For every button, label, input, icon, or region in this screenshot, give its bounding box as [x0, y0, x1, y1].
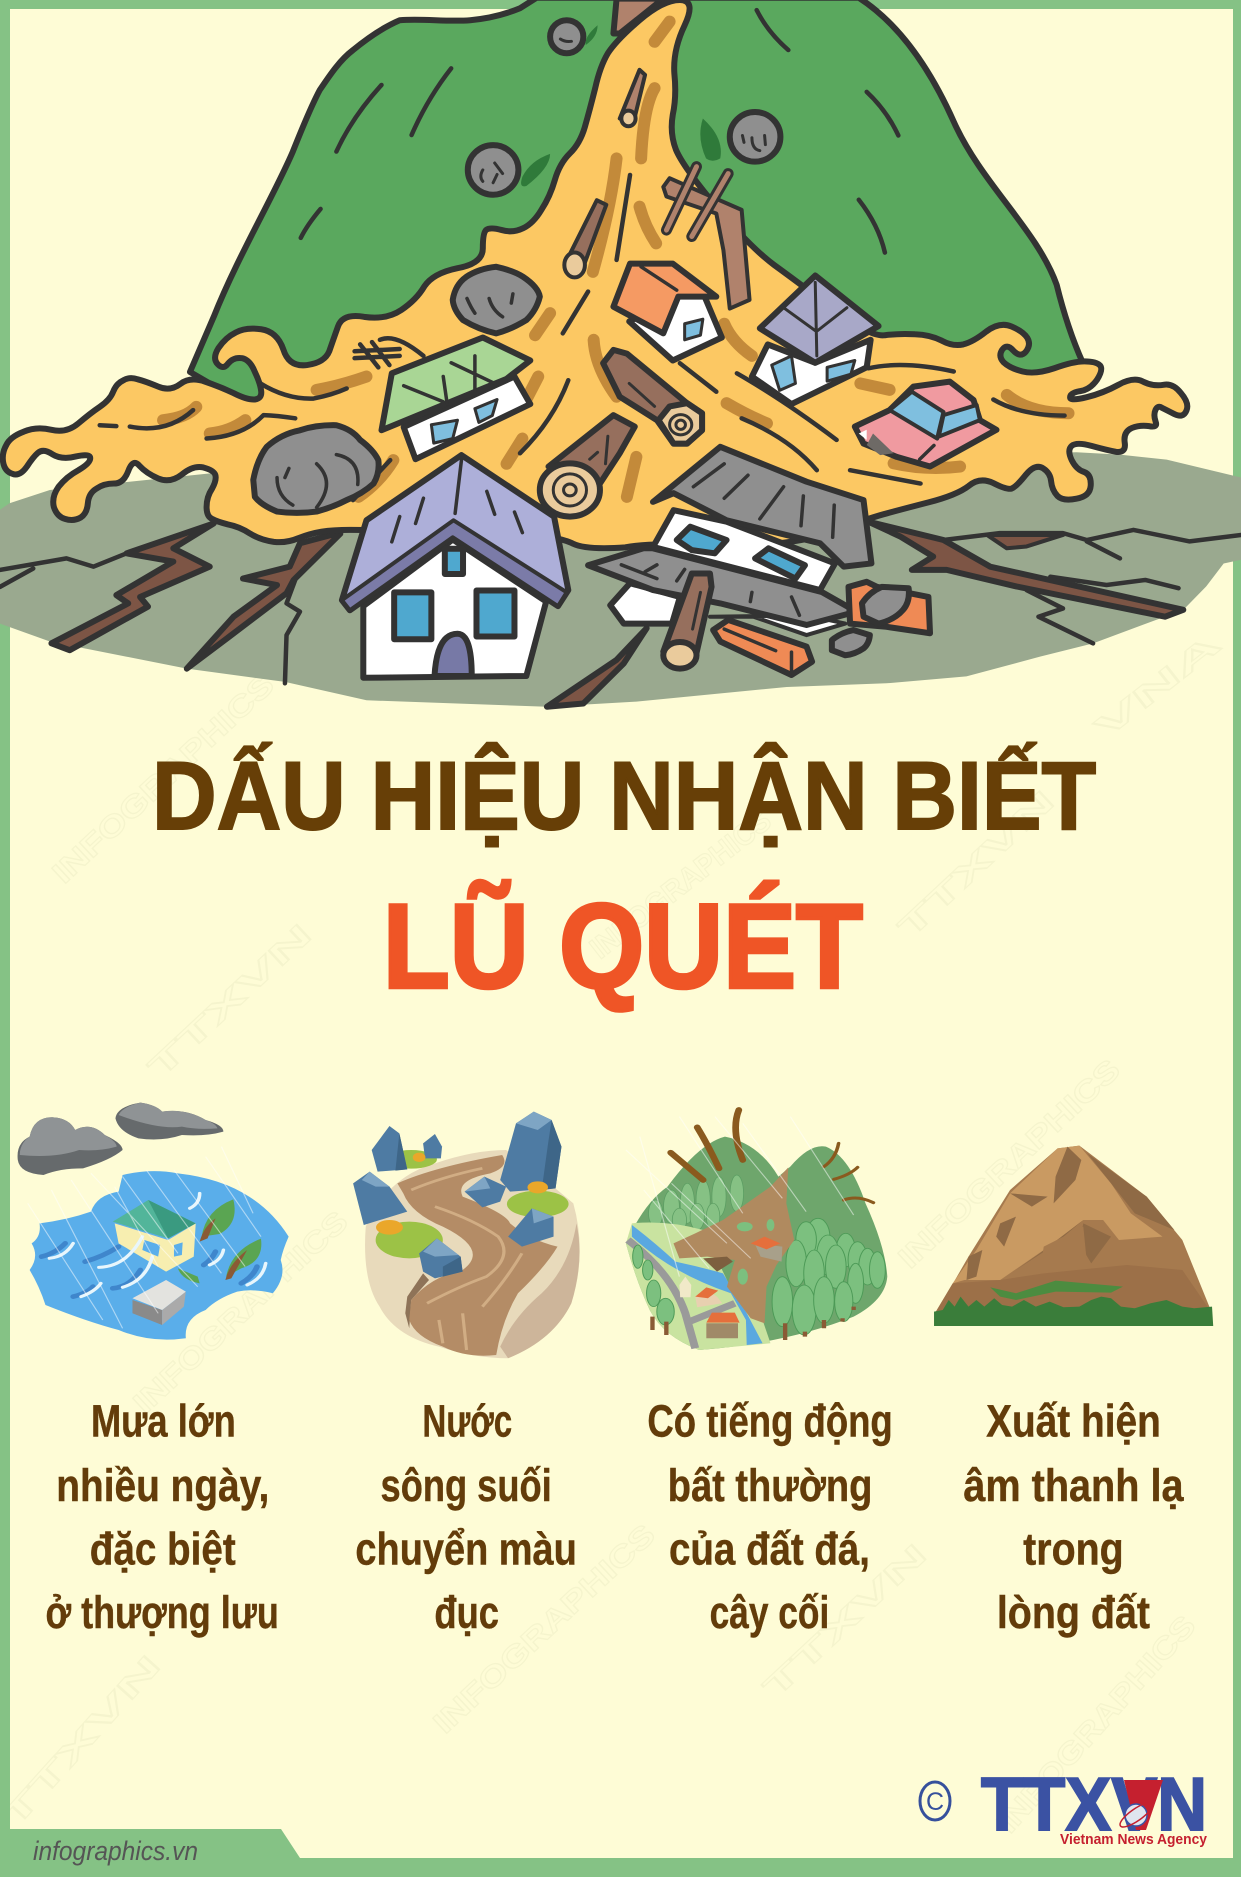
sign 4 caption: Xuất hiện — [986, 1396, 1161, 1447]
sign 4 caption: âm thanh lạ — [963, 1460, 1184, 1511]
valley fields — [626, 1222, 770, 1350]
cliff edge — [405, 1273, 429, 1328]
text group — [45, 741, 1184, 1638]
watermarks: VNA — [1089, 627, 1228, 746]
watermarks: INFOGRAPHICS — [427, 1518, 662, 1740]
lower slope — [935, 1265, 1212, 1313]
road — [628, 1240, 735, 1348]
copyright mark: C — [926, 1788, 944, 1816]
sign 4 caption: lòng đất — [997, 1587, 1150, 1638]
watermarks: INFOGRAPHICS — [892, 1053, 1127, 1275]
big purple roof house — [342, 455, 568, 678]
blue rocks — [353, 1112, 561, 1278]
website label: infographics.vn — [33, 1836, 198, 1866]
hill — [626, 1137, 887, 1350]
watermarks: TTXVN — [757, 1538, 933, 1705]
forest base — [934, 1297, 1213, 1326]
sign 3 caption — [647, 1396, 893, 1638]
watermarks: TTXVN — [892, 785, 1061, 945]
sign 4 caption — [963, 1396, 1184, 1638]
houses — [679, 1237, 782, 1338]
watermarks — [0, 627, 1228, 1840]
icon: rain clouds over flooded house — [18, 1103, 289, 1340]
small logs and fence — [355, 70, 750, 367]
forest trees right — [772, 1218, 885, 1335]
mudslide — [673, 1167, 794, 1323]
mountain body — [935, 1146, 1212, 1315]
light rock faces — [953, 1146, 1163, 1283]
sign 2 caption: sông suối — [381, 1460, 552, 1511]
valley trees — [633, 1245, 674, 1325]
green roof collapsed house — [382, 338, 530, 459]
rain — [626, 1117, 854, 1277]
leaves on slide — [737, 1219, 774, 1285]
icon: landslide hillside with trees and houses — [626, 1110, 887, 1350]
sign 2 caption — [355, 1396, 577, 1638]
watermarks: INFOGRAPHICS — [46, 668, 281, 890]
sign 1 caption: đặc biệt — [90, 1524, 236, 1575]
trunk at summit — [613, 0, 663, 34]
thin branches — [824, 1143, 873, 1203]
river — [632, 1225, 763, 1345]
river — [397, 1155, 558, 1356]
watermarks: TTXVN — [142, 918, 318, 1085]
sign 2 caption: Nước — [422, 1396, 512, 1447]
watermarks: INFOGRAPHICS — [584, 804, 778, 966]
TTXVN logo: Vietnam News Agency — [1060, 1831, 1208, 1848]
watermarks: INFOGRAPHICS — [127, 1205, 355, 1420]
boulders on the slope — [468, 20, 780, 195]
mud flow — [3, 0, 1187, 548]
ground plain — [0, 452, 1241, 707]
green mountain — [190, 0, 1083, 422]
sign 1 caption: Mưa lớn — [91, 1396, 236, 1447]
sign 2 caption: chuyển màu — [355, 1524, 577, 1575]
hero illustration: flash flood hitting a village — [0, 0, 1241, 707]
dark ridges — [966, 1147, 1174, 1280]
river currents — [411, 1168, 522, 1350]
orange roof house — [613, 264, 722, 360]
debris: log, beam and stones — [663, 574, 930, 675]
title line 2: LŨ QUÉT — [383, 880, 863, 1014]
icon: brown mountain with forest — [934, 1146, 1213, 1326]
sign 1 caption: ở thượng lưu — [45, 1587, 279, 1638]
sign 3 caption: Có tiếng động — [647, 1396, 893, 1447]
rock shade — [500, 1223, 579, 1358]
flooded house — [113, 1200, 196, 1272]
grass strip — [990, 1281, 1123, 1300]
sign 1 caption: nhiều ngày, — [56, 1460, 269, 1511]
grass patches — [376, 1150, 569, 1258]
sign 3 caption: cây cối — [710, 1587, 829, 1638]
rock base — [365, 1150, 580, 1358]
copyright mark — [920, 1782, 950, 1820]
sign 3 caption: bất thường — [668, 1460, 872, 1511]
large boulders — [253, 267, 540, 513]
flowers — [376, 1153, 548, 1235]
inner face — [1040, 1227, 1087, 1273]
flood water — [30, 1171, 289, 1340]
TTXVN logo: TTXVN — [981, 1762, 1207, 1846]
clouds — [18, 1103, 223, 1175]
watermarks: INFOGRAPHICS — [991, 1610, 1203, 1840]
flooded trees — [178, 1199, 261, 1283]
tree trunks — [652, 1307, 854, 1340]
mud shadow — [703, 1257, 733, 1272]
grey roof broken house — [588, 447, 871, 635]
waves — [42, 1193, 266, 1297]
flying branches — [671, 1110, 743, 1180]
red car — [855, 382, 996, 467]
mountain slope lines and dark leaves — [301, 10, 898, 253]
ground cracks — [0, 522, 1241, 707]
icon: muddy river on rock island — [353, 1112, 580, 1358]
upper-left forest — [649, 1175, 744, 1232]
big log left — [540, 415, 635, 517]
sign 1 caption — [45, 1396, 279, 1638]
grey house — [132, 1280, 186, 1325]
mud swashes and lines — [100, 22, 1069, 500]
big log right — [603, 350, 702, 444]
rain — [28, 1147, 261, 1328]
sign 2 caption: đục — [434, 1587, 499, 1638]
purple roof small house — [752, 276, 879, 404]
sign 4 caption: trong — [1023, 1524, 1124, 1575]
title line 1: DẤU HIỆU NHẬN BIẾT — [152, 741, 1096, 850]
sign 3 caption: của đất đá, — [669, 1524, 870, 1575]
